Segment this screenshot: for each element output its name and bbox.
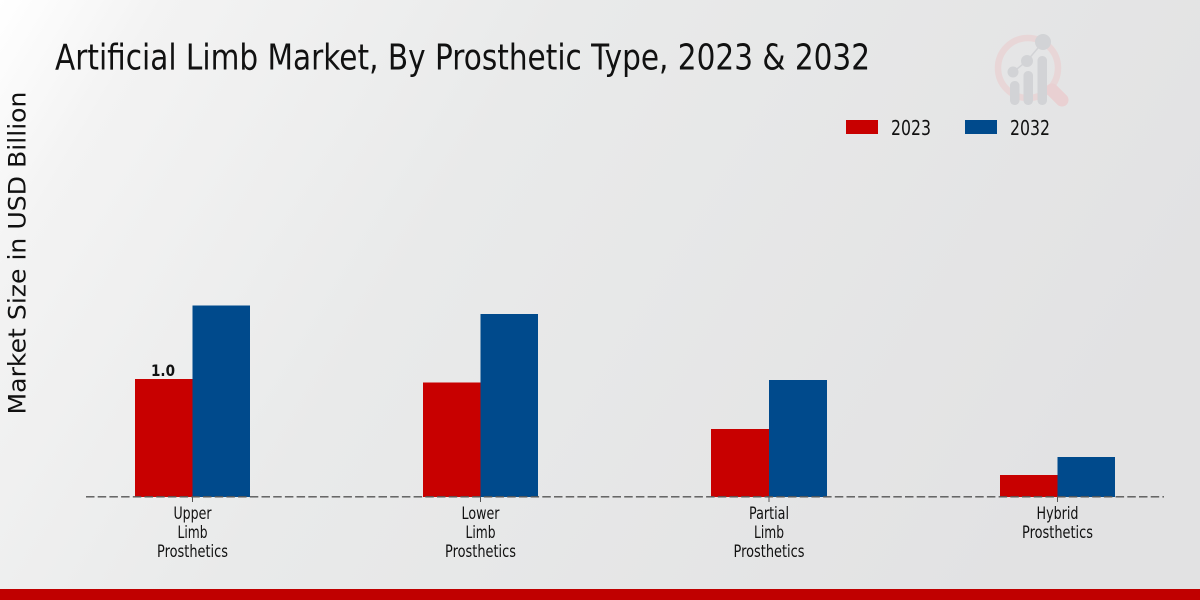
legend item: 2032 — [965, 116, 1050, 140]
icon: magnifier logo watermark — [998, 34, 1062, 105]
category label: Upper Limb Prosthetics: Prosthetics — [157, 542, 228, 562]
category label: Partial Limb Prosthetics: Limb — [754, 523, 784, 543]
category label: Partial Limb Prosthetics: Partial — [749, 504, 789, 524]
category label: Upper Limb Prosthetics — [157, 504, 228, 562]
bar group: Upper Limb Prosthetics — [135, 306, 250, 497]
category label: Lower Limb Prosthetics: Lower — [462, 504, 500, 524]
bar group: Lower Limb Prosthetics — [423, 314, 538, 497]
category label: Lower Limb Prosthetics — [445, 504, 516, 562]
bar chart — [86, 306, 1164, 562]
category label: Hybrid Prosthetics: Prosthetics — [1022, 523, 1093, 543]
legend item: 2032: 2032 — [1010, 116, 1050, 140]
title: Artificial Limb Market, By Prosthetic Type, 2023 & 2032 — [55, 38, 870, 78]
y-axis title: Market Size in USD Billion — [4, 92, 32, 414]
category label: Hybrid Prosthetics: Hybrid — [1036, 504, 1078, 524]
category label: Lower Limb Prosthetics: Limb — [466, 523, 496, 543]
category label: Lower Limb Prosthetics: Prosthetics — [445, 542, 516, 562]
data label: 1.0: 1.0 — [151, 361, 175, 380]
category label: Hybrid Prosthetics — [1022, 504, 1093, 543]
category label: Partial Limb Prosthetics — [734, 504, 805, 562]
legend — [846, 116, 1050, 140]
footer bar — [0, 589, 1200, 600]
category label: Upper Limb Prosthetics: Limb — [178, 523, 208, 543]
bar group: Hybrid Prosthetics — [1000, 457, 1115, 497]
x-axis baseline — [86, 497, 1164, 502]
bar group: Partial Limb Prosthetics — [711, 380, 827, 497]
category label: Partial Limb Prosthetics: Prosthetics — [734, 542, 805, 562]
legend item: 2023: 2023 — [891, 116, 931, 140]
category label: Upper Limb Prosthetics: Upper — [174, 504, 212, 524]
legend item: 2023 — [846, 116, 931, 140]
